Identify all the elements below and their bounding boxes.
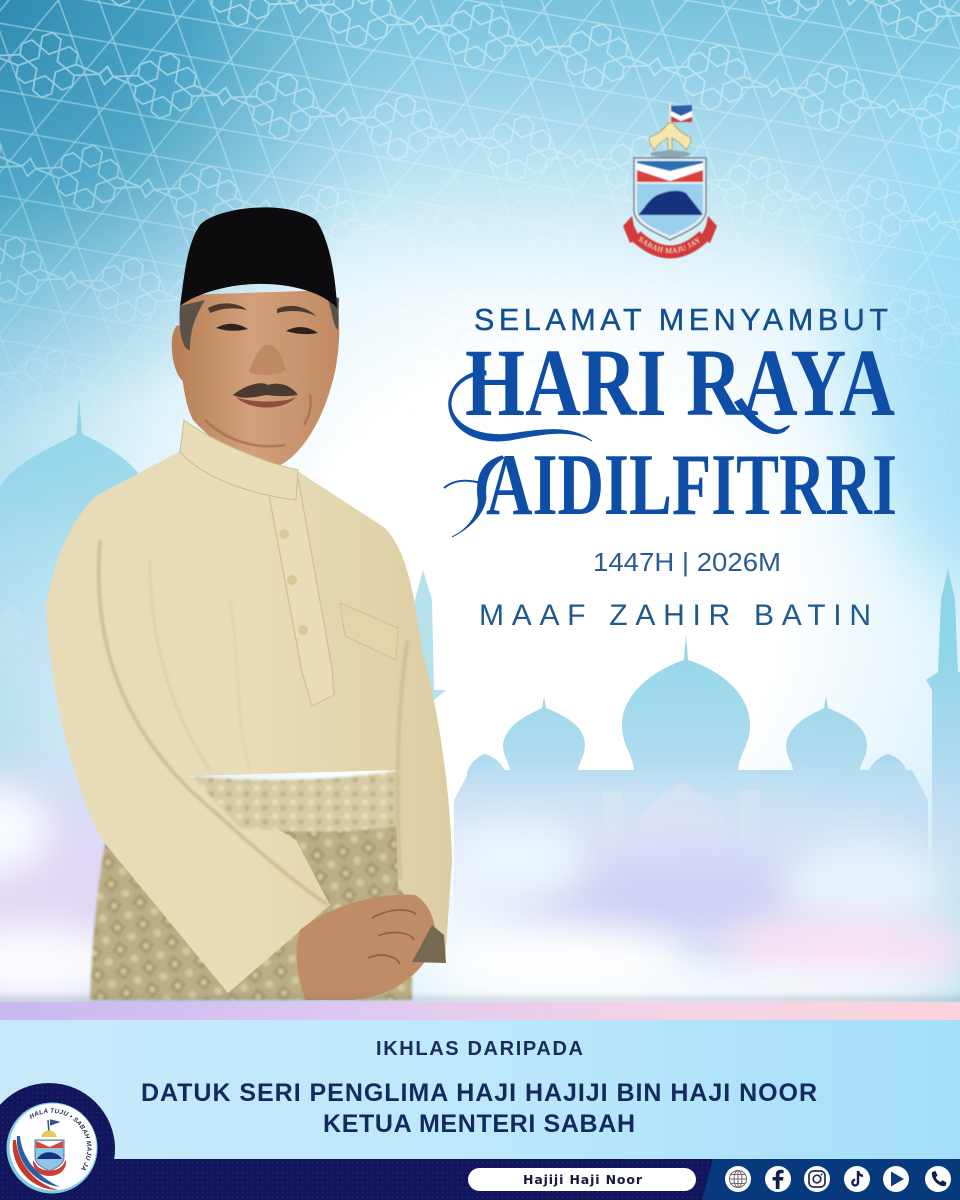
left mosque silhouette — [0, 399, 138, 632]
icon: play — [883, 1166, 909, 1192]
year line: 1447H | 2026M — [593, 547, 781, 577]
background: right glow — [855, 70, 960, 590]
figure: mandarin collar — [180, 420, 298, 500]
greeting: Maaf Zahir Batin: MAAF ZAHIR BATIN — [479, 599, 871, 632]
bottom panel: colour strip — [0, 996, 960, 1020]
figure: songkok cap — [180, 207, 337, 308]
caption: name: DATUK SERI PENGLIMA HAJI HAJIJI BIN HAJI NOOR — [141, 1079, 817, 1107]
footer bar — [0, 1159, 960, 1200]
caption: position: KETUA MENTERI SABAH — [323, 1110, 635, 1138]
footer: name pill: Hajiji Haji Noor — [523, 1172, 643, 1187]
clouds — [0, 780, 960, 1020]
figure: sash belt — [192, 770, 400, 832]
caption: Ikhlas Daripada: IKHLAS DARIPADA — [376, 1038, 583, 1060]
icon: tiktok — [844, 1166, 870, 1192]
logo badge: Hala Tuju Sabah Maju Jaya — [0, 1083, 115, 1194]
icon: instagram — [804, 1166, 830, 1192]
figure: baju body — [46, 450, 452, 993]
crest scroll — [622, 216, 718, 260]
footer: name pill — [468, 1168, 696, 1191]
figure: placket and buttons — [268, 478, 334, 706]
figure: sleeve folds — [99, 540, 408, 905]
background: geometric pattern — [0, 0, 960, 401]
bottom panel: message background — [0, 1020, 960, 1160]
figure: clasped hands — [297, 895, 446, 1000]
icon: facebook — [765, 1166, 791, 1192]
figure: portrait illustration — [46, 207, 452, 1000]
figure: sampin cloth — [90, 820, 412, 1000]
small minaret behind figure — [415, 570, 446, 720]
crest shield — [634, 158, 706, 240]
right mosque silhouette — [454, 568, 960, 882]
crest: Sabah coat of arms — [622, 102, 718, 260]
crest flag — [669, 102, 692, 148]
logo badge: Hala Tuju Sabah Maju Jaya: HALA TUJU • SABAH MAJU JAYA — [30, 1108, 92, 1170]
figure: head — [172, 290, 339, 468]
icon: globe — [725, 1166, 751, 1192]
figure: pocket — [340, 603, 398, 660]
crest arms — [649, 123, 691, 150]
greeting: Selamat Menyambut: SELAMAT MENYAMBUT — [474, 303, 888, 337]
logo badge: crest — [33, 1120, 66, 1176]
social icons — [725, 1166, 951, 1192]
icon: phone — [925, 1166, 951, 1192]
